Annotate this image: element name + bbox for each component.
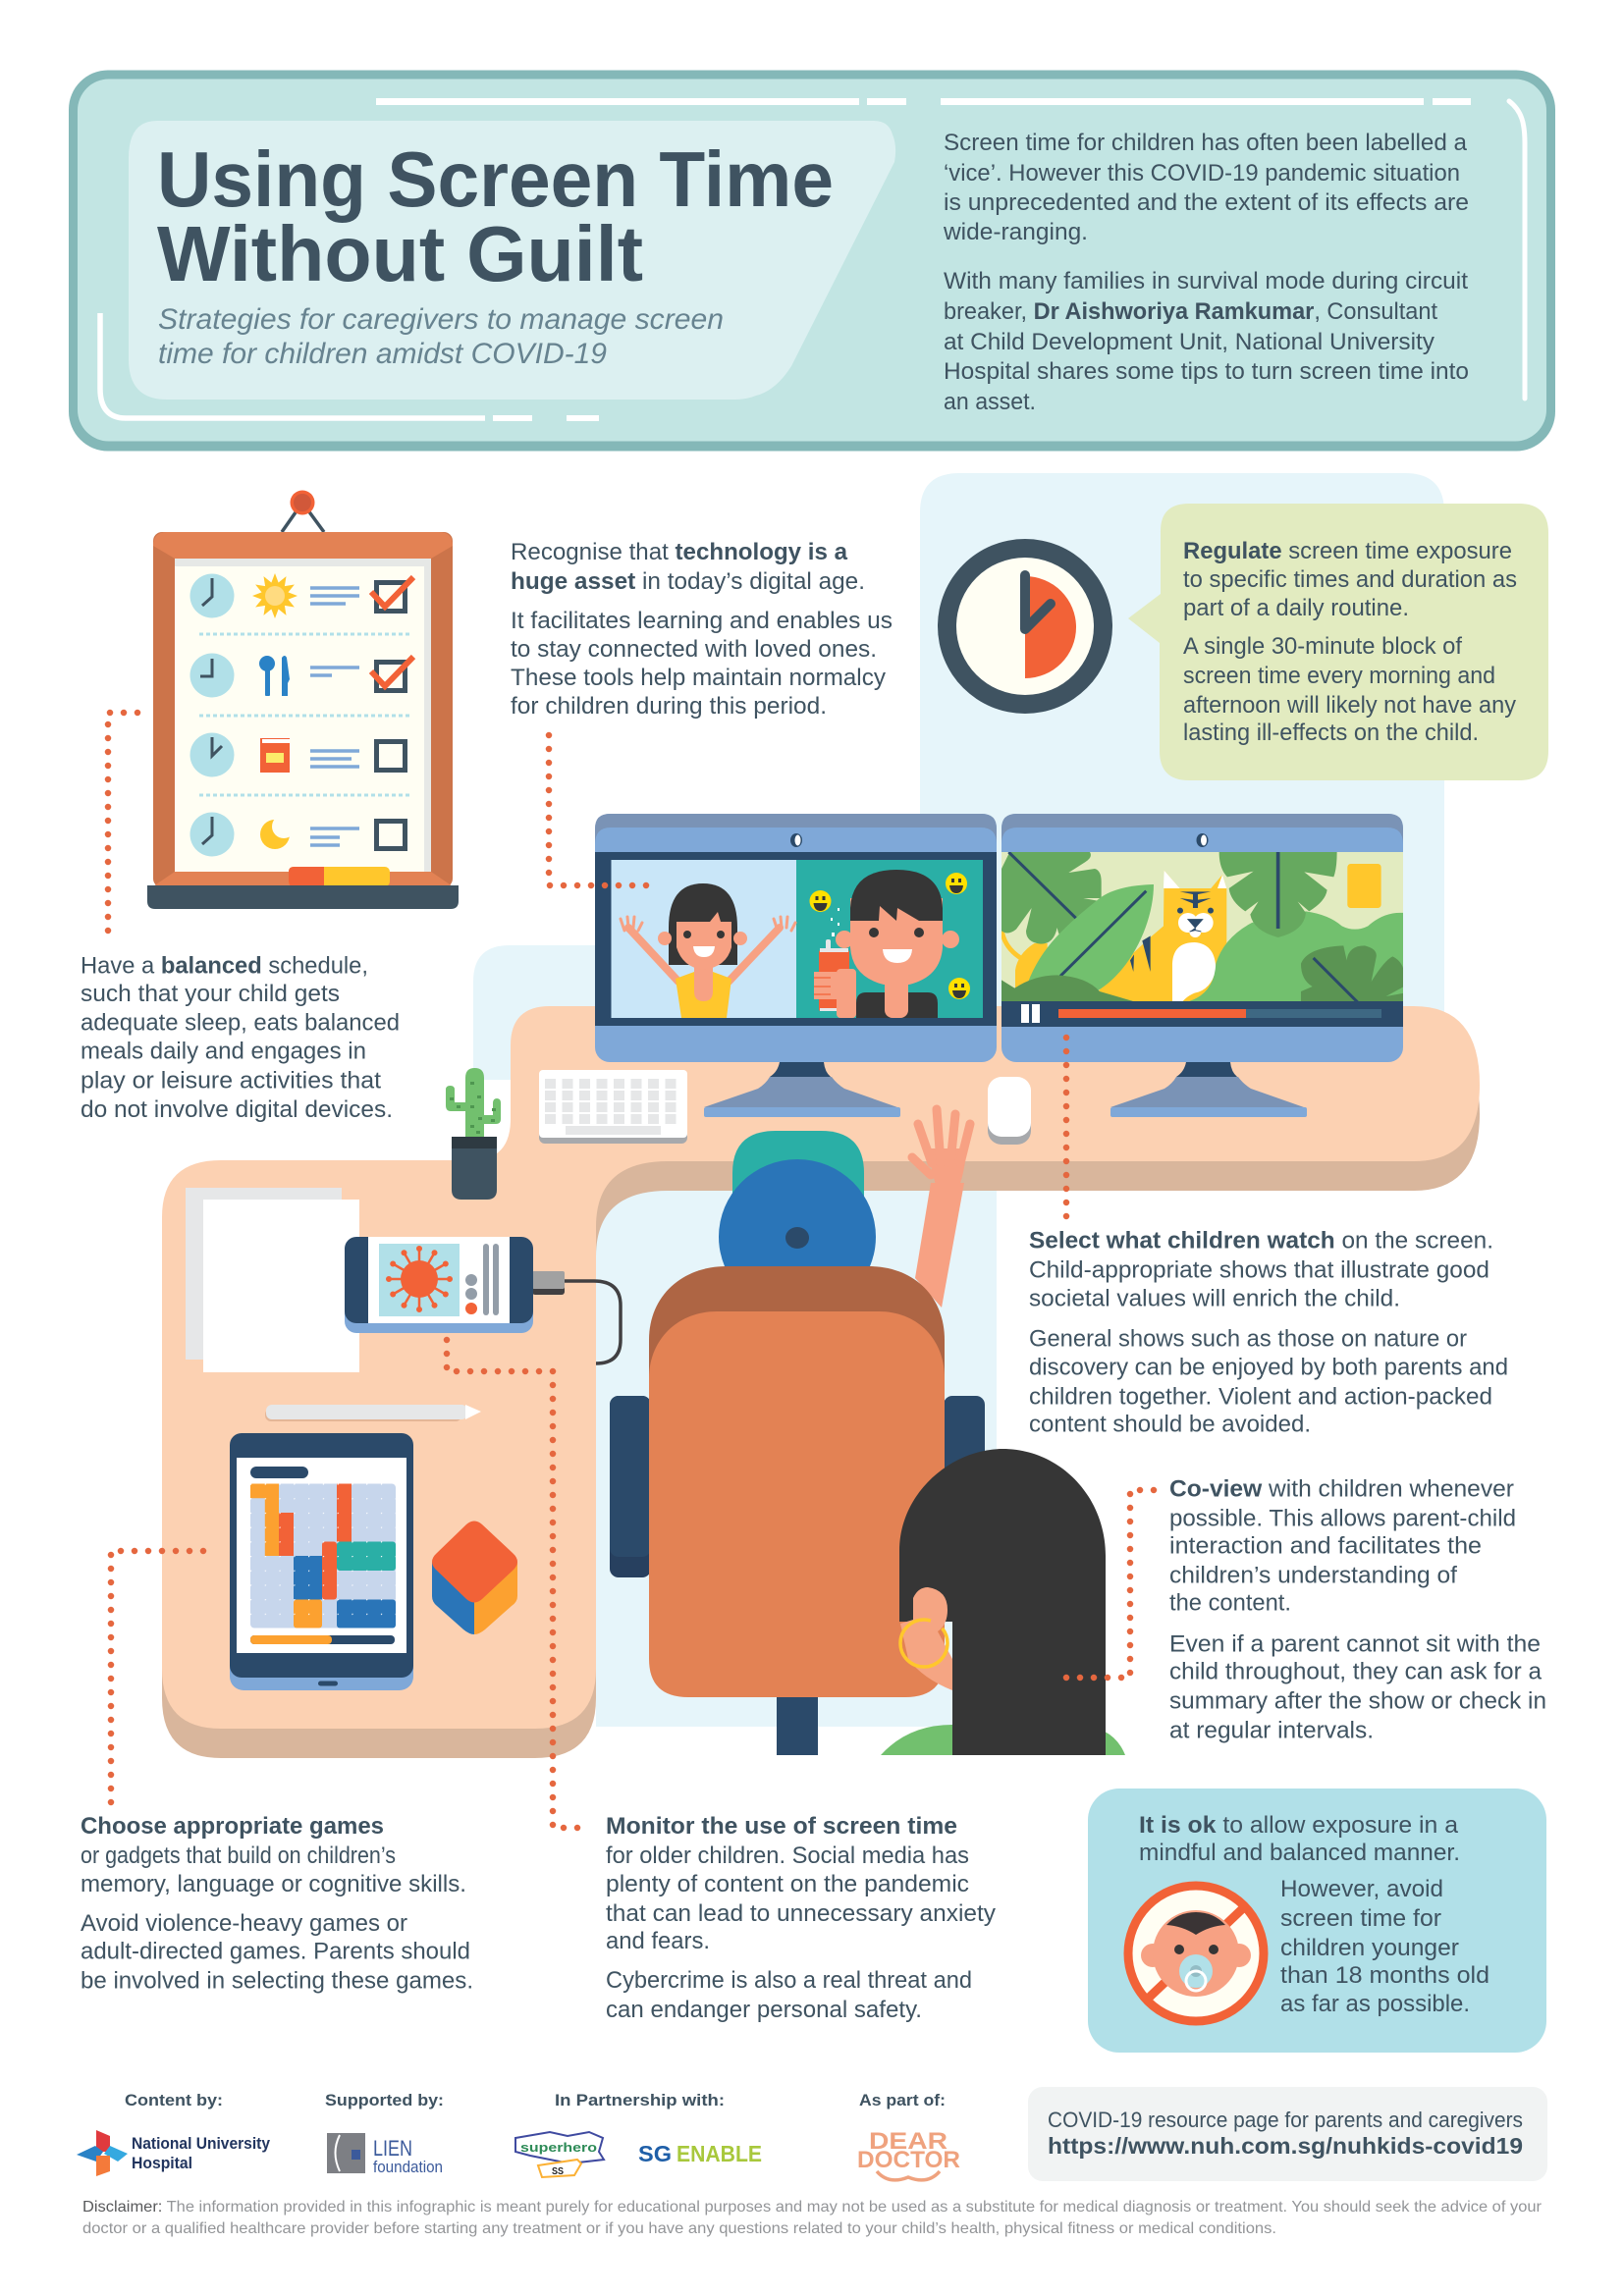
text: monitor the use: plenty of content on the pandemic (606, 1871, 969, 1897)
panel: regulate: afternoon will likely not have any (1183, 692, 1516, 719)
text: balanced schedule: adequate sleep, eats balanced (81, 1009, 400, 1037)
title: Using Screen Time (157, 135, 834, 223)
disclaimer: doctor or a qualified healthcare provider before starting any treatment or if you have any questions related to your child’s health, physical fitness or medical conditions. (82, 2220, 1276, 2237)
label: as part of: As part of: (859, 2091, 946, 2109)
text: select what children watch: discovery can be enjoyed by both parents and (1029, 1355, 1508, 1380)
logo: sg enable (638, 2141, 762, 2166)
text: select what children watch: children together. Violent and action-packed (1029, 1384, 1492, 1410)
text: choose appropriate games: Choose appropriate games (81, 1813, 384, 1840)
panel: regulate: part of a daily routine. (1183, 595, 1409, 621)
leaf (1028, 884, 1154, 991)
stylus (265, 1405, 481, 1421)
tablet with puzzle game (230, 1433, 413, 1690)
resource link box: COVID-19 resource page for parents and caregivers (1048, 2108, 1523, 2132)
emoji (809, 873, 970, 999)
logo: lien foundation (327, 2133, 443, 2176)
text: select what children watch: General shows such as those on nature or (1029, 1325, 1467, 1353)
text: select what children watch: content should be avoided. (1029, 1412, 1311, 1437)
text: technology is a huge asset (511, 539, 893, 720)
text: co-view: Even if a parent cannot sit with the (1169, 1631, 1541, 1657)
title: Without Guilt (157, 210, 643, 297)
monitor stand (1110, 1062, 1307, 1117)
header intro text: With many families in survival mode during circuit (944, 268, 1468, 294)
logo: lien foundation: foundation (373, 2158, 443, 2176)
panel: regulate: lasting ill-effects on the child. (1183, 720, 1479, 746)
label: partnership: In Partnership with: (555, 2091, 725, 2109)
panel: it is ok: than 18 months old (1280, 1962, 1489, 1989)
header intro text: an asset. (944, 389, 1036, 415)
parent from behind (881, 1449, 1125, 1755)
resource link box (1028, 2087, 1547, 2181)
text: co-view: the content. (1169, 1590, 1291, 1616)
text: balanced schedule (81, 952, 400, 1123)
text: balanced schedule: meals daily and engages in (81, 1039, 366, 1064)
right monitor (1001, 814, 1404, 1117)
footer logos (77, 2091, 960, 2180)
text: technology is a huge asset: These tools help maintain normalcy (511, 665, 886, 691)
jungle video with tiger (1001, 849, 1404, 1006)
text: co-view (1169, 1476, 1546, 1743)
text: co-view: summary after the show or check in (1169, 1688, 1546, 1714)
text: technology is a huge asset: for children during this period. (511, 693, 827, 720)
logo: dear doctor (857, 2128, 960, 2180)
left monitor (595, 814, 997, 1117)
disclaimer: Disclaimer: The information provided in this infographic is meant purely for educational purposes and may not be used as a substitute for medical diagnosis or treatment. You should seek the advice of your (82, 2199, 1543, 2216)
text: monitor the use: that can lead to unnecessary anxiety (606, 1900, 996, 1927)
icon: sun (252, 573, 298, 618)
icon: moon (260, 815, 296, 849)
text: choose appropriate games: memory, language or cognitive skills. (81, 1871, 466, 1897)
logo: dear doctor: DOCTOR (857, 2147, 960, 2173)
header intro text: is unprecedented and the extent of its effects are (944, 189, 1469, 216)
desk (162, 1006, 1480, 1758)
leader: select (1063, 1038, 1069, 1218)
header intro text: ‘vice’. However this COVID-19 pandemic situation (944, 160, 1460, 187)
leader: co-view (1059, 1490, 1154, 1678)
text: co-view: possible. This allows parent-child (1169, 1506, 1516, 1531)
logo: dear doctor: DEAR (869, 2128, 947, 2155)
text: monitor the use: Cybercrime is also a real threat and (606, 1967, 972, 1994)
text: select what children watch: societal values will enrich the child. (1029, 1286, 1400, 1311)
header intro text: Hospital shares some tips to turn screen time into (944, 358, 1469, 385)
panel: regulate: to specific times and duration as (1183, 566, 1517, 593)
text: technology is a huge asset: Recognise that technology is a (511, 539, 848, 565)
text: co-view: interaction and facilitates the (1169, 1533, 1482, 1559)
logo: sg enable: SG (638, 2141, 672, 2166)
soda can (814, 939, 856, 1018)
logo: superhero: SS (552, 2166, 564, 2177)
logo: national university hospital (77, 2130, 270, 2176)
title (157, 135, 834, 297)
leader: schedule (108, 713, 137, 934)
keyboard (539, 1070, 687, 1144)
text: technology is a huge asset: huge asset in today’s digital age. (511, 568, 865, 595)
text: balanced schedule: play or leisure activities that (81, 1068, 381, 1094)
text: choose appropriate games (81, 1813, 473, 1995)
text: monitor the use: for older children. Social media has (606, 1842, 969, 1869)
text: co-view: children’s understanding of (1169, 1563, 1457, 1588)
video controls (1001, 1001, 1403, 1027)
child and chair (610, 1109, 985, 1755)
panel: it is ok: as far as possible. (1280, 1991, 1470, 2017)
panel: it is ok: mindful and balanced manner. (1139, 1840, 1460, 1866)
leader: technology (549, 735, 650, 885)
logo: national university hospital: National University (132, 2134, 270, 2153)
checkboxes (371, 577, 413, 848)
cactus (446, 1068, 501, 1200)
text: balanced schedule: do not involve digital devices. (81, 1096, 393, 1123)
text: choose appropriate games: adult-directed games. Parents should (81, 1938, 470, 1965)
panel: regulate: A single 30-minute block of (1183, 633, 1462, 660)
panel: it is ok (1088, 1789, 1546, 2053)
panel: regulate (1128, 504, 1548, 780)
charging cable (532, 1271, 621, 1363)
monitor stand (704, 1062, 900, 1117)
resource link box: https://www.nuh.com.sg/nuhkids-covid19 (1048, 2133, 1523, 2159)
pin and string (282, 491, 324, 532)
clocks (190, 573, 234, 856)
leaf (1219, 852, 1337, 937)
phone (345, 1237, 621, 1363)
title card (129, 121, 895, 400)
panel: it is ok: It is ok to allow exposure in a (1139, 1812, 1459, 1839)
head and headrest (719, 1131, 876, 1314)
text: co-view: child throughout, they can ask for a (1169, 1659, 1543, 1684)
tiger (1098, 871, 1226, 1003)
chair back (649, 1266, 945, 1697)
text: technology is a huge asset: to stay connected with loved ones. (511, 636, 877, 663)
text: monitor the use: Monitor the use of screen time (606, 1813, 957, 1840)
mouse (988, 1077, 1031, 1145)
text: monitor the use: can endanger personal safety. (606, 1997, 922, 2023)
disclaimer (82, 2199, 1543, 2237)
text: monitor the use (606, 1813, 996, 2023)
text: technology is a huge asset: It facilitates learning and enables us (511, 608, 893, 634)
icon: cutlery (259, 656, 290, 696)
panel: it is ok: However, avoid (1280, 1876, 1443, 1902)
subtitle (158, 303, 724, 370)
boy on video call (809, 870, 970, 1018)
panel: regulate: Regulate screen time exposure (1183, 538, 1512, 564)
earring (900, 1620, 947, 1667)
text: choose appropriate games: Avoid violence-heavy games or (81, 1910, 407, 1937)
text: select what children watch (1029, 1227, 1508, 1437)
icon: no screen for baby (1128, 1886, 1264, 2021)
header intro text: at Child Development Unit, National University (944, 329, 1435, 355)
leader: games (111, 1551, 203, 1806)
icon: clock (938, 539, 1112, 714)
background panels (473, 473, 1444, 1727)
puzzle grid (250, 1484, 396, 1628)
subtitle: time for children amidst COVID-19 (158, 338, 607, 370)
header intro text: breaker, Dr Aishworiya Ramkumar, Consultant (944, 298, 1437, 325)
arm rests (610, 1396, 985, 1577)
toy cube (432, 1522, 517, 1634)
text: monitor the use: and fears. (606, 1928, 710, 1954)
text: balanced schedule: Have a balanced schedule, (81, 952, 368, 980)
text: co-view: at regular intervals. (1169, 1718, 1374, 1743)
header intro text (943, 130, 1469, 415)
panel: it is ok: screen time for (1280, 1905, 1441, 1932)
icon: virus (389, 1249, 450, 1309)
marker (289, 867, 390, 886)
label: content by: Content by: (125, 2091, 223, 2109)
girl on video call (621, 883, 795, 1018)
panel: regulate: screen time every morning and (1183, 663, 1495, 689)
leaf (1001, 852, 1103, 945)
text: co-view: Co-view with children whenever (1169, 1476, 1514, 1502)
leader: monitor (447, 1340, 589, 1828)
header panel (69, 71, 1555, 452)
label: supported by: Supported by: (325, 2091, 444, 2109)
child arm and hand (912, 1109, 970, 1308)
leaf (1301, 945, 1404, 1003)
text: balanced schedule: such that your child gets (81, 981, 340, 1007)
papers (186, 1188, 359, 1372)
logo: national university hospital: Hospital (132, 2154, 192, 2172)
logo: lien foundation: LIEN (373, 2136, 412, 2161)
schedule board (147, 491, 459, 909)
logo: superhero: superhero (520, 2140, 597, 2155)
panel: it is ok: children younger (1280, 1935, 1459, 1961)
header intro text: wide-ranging. (943, 219, 1088, 245)
text: select what children watch: Child-appropriate shows that illustrate good (1029, 1256, 1489, 1284)
subtitle: Strategies for caregivers to manage screen (158, 303, 724, 336)
icon: book (260, 738, 290, 773)
logo: superhero (515, 2132, 604, 2177)
text: choose appropriate games: or gadgets that build on children’s (81, 1842, 396, 1869)
text: choose appropriate games: be involved in selecting these games. (81, 1967, 473, 1995)
text: select what children watch: Select what children watch on the screen. (1029, 1227, 1493, 1255)
header intro text: Screen time for children has often been labelled a (944, 130, 1468, 156)
logo: sg enable: ENABLE (677, 2141, 762, 2166)
